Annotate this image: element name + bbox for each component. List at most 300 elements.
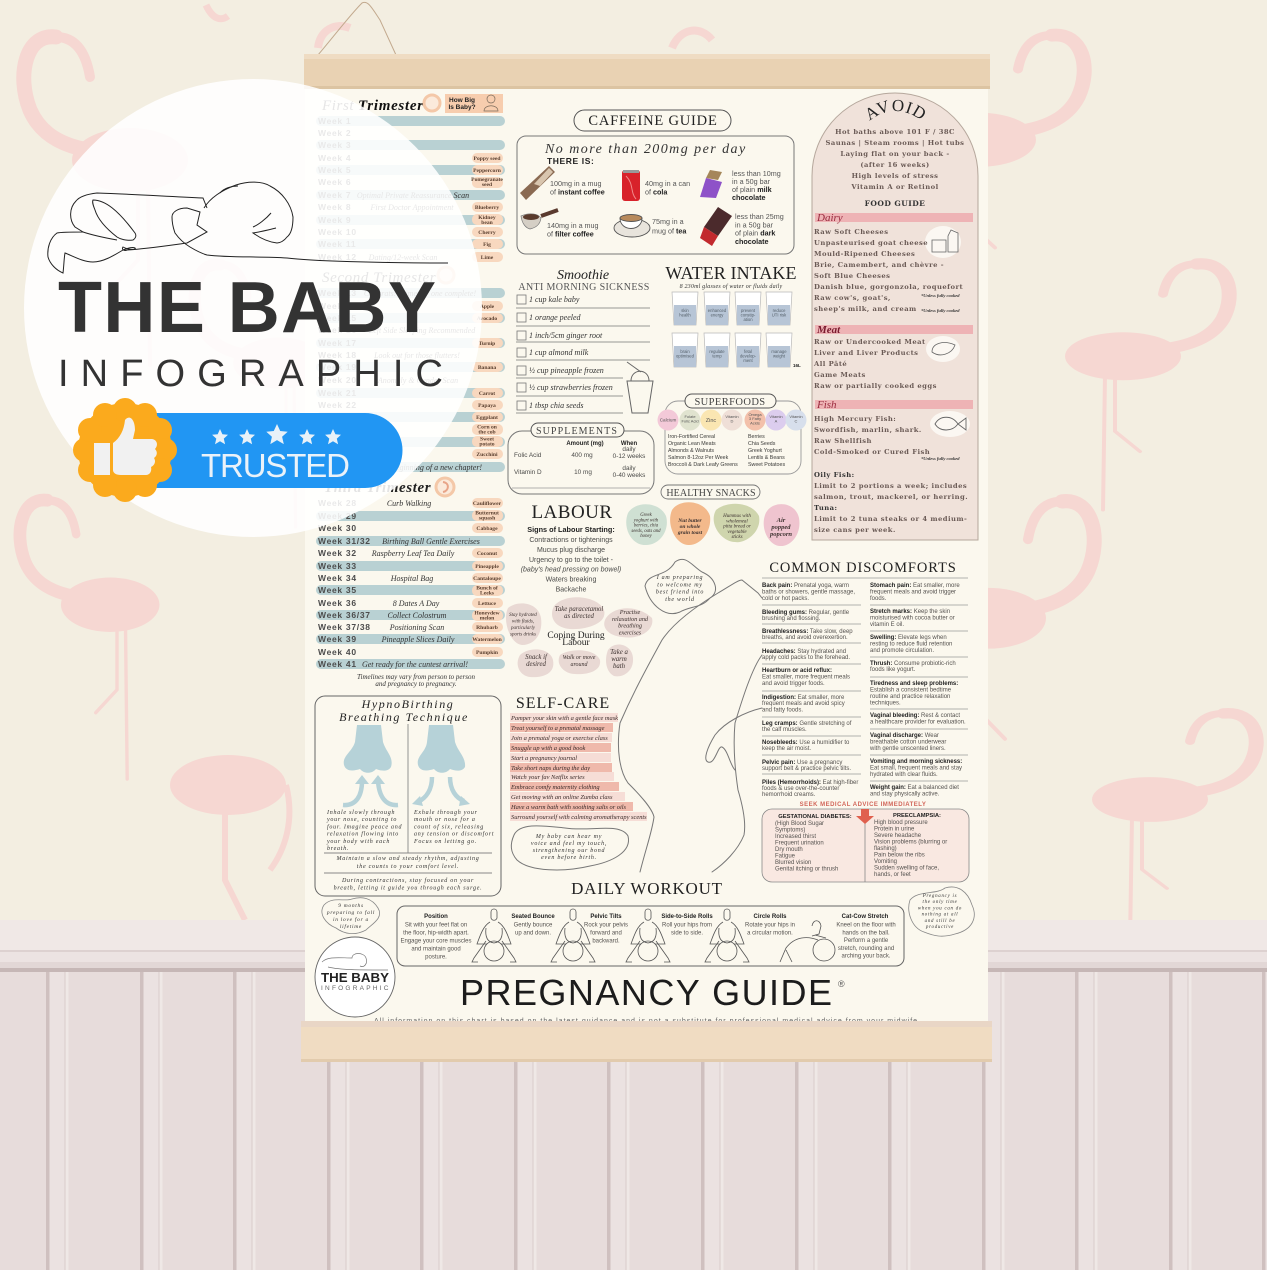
coping during labour blobs: exercises xyxy=(619,629,642,636)
bubble: 9 months: in love for a xyxy=(333,916,369,923)
supplements table xyxy=(514,441,645,479)
left column tips: brushing and flossing. xyxy=(762,616,821,622)
exercise: circle rolls xyxy=(745,914,835,962)
overlay: white logo circle xyxy=(24,79,482,537)
nutrient circles: Acids xyxy=(750,420,760,425)
coping during labour blobs: particularly xyxy=(510,626,536,631)
supplements table: 0-40 weeks xyxy=(613,472,645,479)
superfood lists: Broccoli & Dark Leafy Greens xyxy=(668,462,738,468)
week list: second trimester: Week 13 xyxy=(318,288,357,298)
ingredient list: 1 tbsp chia seeds xyxy=(529,401,583,410)
superfood lists xyxy=(668,434,785,468)
caffeine item: instant coffee: 100mg in a mug xyxy=(550,179,602,188)
superfood lists: Almonds & Walnuts xyxy=(668,448,714,454)
week list: second trimester: Avocado xyxy=(477,316,497,322)
caffeine item: tea: mug of xyxy=(652,226,676,236)
gestational diabetes list: Genital itching or thrush xyxy=(775,866,838,872)
week list: first trimester: Poppy seed xyxy=(474,156,501,162)
week list: first trimester: seed xyxy=(482,182,493,188)
nutrient circles: 3 Fatty xyxy=(749,416,761,421)
coping during labour blobs: bath xyxy=(613,663,626,670)
supplements table: daily xyxy=(622,465,636,472)
supplements table: Vitamin D xyxy=(514,469,542,476)
week list: third trimester: Week 29 xyxy=(318,511,357,521)
exercise: seated bounce: Gently bounce xyxy=(514,922,552,928)
supplements table: 10 mg xyxy=(574,469,592,476)
week list: first trimester: Week 2 xyxy=(318,128,351,138)
snack: yoghurt blob xyxy=(626,504,667,545)
timeline note xyxy=(357,673,475,688)
coping during labour blobs: Take a xyxy=(610,649,628,656)
left column tips xyxy=(762,583,858,798)
heading: self-care: SELF-CARE xyxy=(516,695,610,712)
trusted badge xyxy=(73,398,402,502)
self-care list: Have a warm bath with soothing salts or oils xyxy=(510,804,627,811)
week list: second trimester: Anomaly & Gender Scan xyxy=(377,376,458,385)
food guide: fish: Fish xyxy=(816,399,837,411)
timeline note: Timelines may vary from person to person xyxy=(357,673,475,681)
supplements table: When xyxy=(621,441,637,447)
how big is baby label: Is Baby? xyxy=(448,104,476,111)
left column tips: frequent meals and avoid spicy xyxy=(762,701,845,707)
superfood lists: Berries xyxy=(748,434,765,440)
week list: third trimester: 8 Dates A Day xyxy=(393,599,440,608)
week list: third trimester xyxy=(318,498,503,669)
week list: second trimester: the cob xyxy=(478,430,496,436)
right column tips: Tiredness and sleep problems: xyxy=(870,681,958,687)
glasses grid: develop- xyxy=(740,354,757,358)
week list: third trimester: Week 34 xyxy=(318,573,357,583)
exhale instructions: count of six, releasing xyxy=(414,823,484,830)
left column tips: Back pain: Prenatal yoga, warm xyxy=(762,583,849,589)
heading: avoid: AVOID xyxy=(868,100,925,121)
snack: hummus blob: Hummus with xyxy=(723,514,751,519)
overlay brand logo xyxy=(48,182,448,395)
glasses grid: fetal xyxy=(744,349,752,354)
exhale instructions: Exhale through your xyxy=(414,810,478,816)
caffeine item: dark chocolate: in a 50g bar xyxy=(735,220,774,229)
heading: superfoods: SUPERFOODS xyxy=(694,397,766,408)
week list: second trimester: Left Side Sleeping Recommended xyxy=(368,326,476,335)
heading: hypnobirthing: Breathing Technique xyxy=(339,710,469,724)
right column tips: resting to reduce fluid retention xyxy=(870,642,952,648)
bubble: 9 months xyxy=(322,898,380,934)
week list: second trimester: Week 24 xyxy=(318,425,357,435)
week list: second trimester: Sweet xyxy=(480,436,494,442)
food guide: fish xyxy=(814,399,973,534)
week list: third trimester: Week 40 xyxy=(318,647,357,657)
exercise: position: posture. xyxy=(425,954,447,960)
brand subtitle: INFOGRAPHIC xyxy=(58,353,443,395)
self-care list: Join a prenatal yoga or exercise class xyxy=(511,735,608,742)
icon: milk chocolate xyxy=(700,170,722,198)
signs of labour: Signs of Labour Starting: xyxy=(527,525,615,534)
exercise: position: the floor, hip-width apart. xyxy=(403,930,469,936)
gestational diabetes list xyxy=(775,814,852,872)
food guide: fish: Raw Shellfish xyxy=(814,437,872,445)
left column tips: and fatty foods. xyxy=(762,707,803,713)
affirmation bubble: best friend: best friend into xyxy=(656,589,704,596)
week list: second trimester: Week 16 xyxy=(318,325,357,335)
left column tips: keep the air moist. xyxy=(762,746,811,752)
coping during labour blobs: Walk or move xyxy=(563,655,595,661)
week list: third trimester: Get ready for the cuntest arrival! xyxy=(362,660,468,669)
exercise: pelvic tilts: Rock your pelvis xyxy=(584,922,628,928)
food guide: dairy: *Unless fully cooked xyxy=(921,293,960,298)
snack: nut butter blob: grain toast xyxy=(677,530,703,536)
right column tips: foods. xyxy=(870,596,887,602)
heading: seek medical advice: SEEK MEDICAL ADVICE IMMEDIATELY xyxy=(800,802,926,808)
snack: hummus blob xyxy=(714,504,759,542)
food guide: dairy: Unpasteurised goat cheese xyxy=(814,239,928,247)
glasses grid: energy xyxy=(711,312,724,318)
coping during labour blobs: Snack if xyxy=(525,654,547,661)
exhale instructions: mouth or nose for a xyxy=(414,816,476,823)
week list: third trimester: Week 37/38 xyxy=(318,622,371,632)
panel: water intake xyxy=(665,263,801,368)
heading: hypnobirthing xyxy=(339,697,469,724)
supplements table: Folic Acid xyxy=(514,452,542,459)
week list: first trimester: Week 7 xyxy=(318,190,351,200)
heading: third trimester: Third Trimester xyxy=(324,480,431,496)
food guide: dairy: Mould-Ripened Cheeses xyxy=(814,250,915,258)
heading: second trimester: Second Trimester xyxy=(322,270,436,286)
bubble: pregnancy productive: the only time xyxy=(922,900,958,905)
coping during labour blobs xyxy=(506,597,652,677)
week list: third trimester: Pineapple xyxy=(475,564,499,570)
week list: third trimester: Coconut xyxy=(477,551,497,557)
preeclampsia list: PREECLAMPSIA: xyxy=(893,813,941,819)
left column tips: cold or hot packs. xyxy=(762,596,809,602)
food guide: dairy: Raw cow's, goat's, xyxy=(814,294,891,302)
week list: second trimester: Week 20 xyxy=(318,375,357,385)
panel: daily workout xyxy=(397,879,904,966)
icon: instant coffee xyxy=(520,166,555,200)
bubble: pregnancy productive: productive xyxy=(925,925,954,930)
week list: second trimester: Week 27 xyxy=(318,462,357,472)
food guide: meat: Raw or partially cooked eggs xyxy=(814,382,937,390)
week list: first trimester: Cherry xyxy=(478,230,496,236)
week list: first trimester: Week 12 xyxy=(318,252,357,262)
nutrient circles: Vitamin xyxy=(725,414,739,419)
right column tips: vitamin E oil. xyxy=(870,622,904,628)
signs of labour: Contractions or tightenings xyxy=(529,537,613,544)
right column tips: Vaginal bleeding: Rest & contact xyxy=(870,713,960,719)
self-care list: Treat yourself to a prenatal massage xyxy=(511,725,605,732)
affirmation bubble: hear my voice: strengthening our bond xyxy=(533,848,606,854)
left column tips: Leg cramps: Gentle stretching of xyxy=(762,721,851,727)
coping during labour blobs: around xyxy=(570,662,589,668)
glasses grid: prevent xyxy=(741,308,755,313)
coping during labour blobs: warm xyxy=(611,656,627,663)
affirmation bubble: best friend: the world xyxy=(665,597,695,603)
week list: first trimester: Week 8 xyxy=(318,202,351,212)
things to avoid: Hot baths above 101 F / 38C xyxy=(835,128,955,136)
supplements table: 0-12 weeks xyxy=(613,453,645,460)
week list: second trimester: Week 19 xyxy=(318,362,357,372)
week list: third trimester: Watermelon xyxy=(472,637,503,643)
superfood lists: Lentils & Beans xyxy=(748,455,785,461)
heading: daily workout: DAILY WORKOUT xyxy=(571,879,723,898)
food guide: meat: Game Meats xyxy=(814,371,866,379)
right column tips: breathable cotton underwear xyxy=(870,740,946,746)
contractions note: breath, letting it guide you through each surge. xyxy=(334,886,482,892)
caffeine item: milk chocolate: of plain xyxy=(732,185,757,194)
glasses grid: UTI risk xyxy=(772,312,787,318)
coping during labour blobs: desired xyxy=(526,661,546,668)
week list: third trimester: Week 31/32 xyxy=(318,536,371,546)
left column tips: support belt & practice pelvic tilts. xyxy=(762,766,851,772)
food guide: fish: salmon, trout, mackerel, or herring. xyxy=(814,493,968,501)
signs of labour: Waters breaking xyxy=(546,576,596,584)
week list: third trimester: Cauliflower xyxy=(473,501,502,507)
caffeine item: tea: tea xyxy=(676,226,687,236)
right column tips xyxy=(869,583,966,798)
exercise: pelvic tilts xyxy=(584,909,670,962)
blue pill xyxy=(150,413,402,488)
inhale instructions: Inhale slowly through xyxy=(327,810,395,816)
week list: second trimester: Eggplant xyxy=(476,415,498,421)
exercise: circle rolls: Rotate your hips in xyxy=(745,922,795,928)
exercise: seated bounce: up and down. xyxy=(515,930,551,936)
nutrient circles: Folate xyxy=(684,414,696,419)
week list: second trimester: Week 23 xyxy=(318,412,357,422)
exercise: position: Sit with your feet flat on xyxy=(405,922,467,928)
week list: third trimester: Week 41 xyxy=(318,659,357,669)
glasses grid: ation xyxy=(743,317,753,322)
exercise: seated bounce xyxy=(511,909,595,962)
week list: first trimester: Peppercorn xyxy=(473,168,502,174)
right column tips: and stay physically active. xyxy=(870,792,940,798)
right column tips: and promote circulation. xyxy=(870,648,934,654)
week list: third trimester: melon xyxy=(480,616,495,622)
gestational diabetes list: GESTATIONAL DIABETES: xyxy=(778,814,852,820)
panel: supplements xyxy=(508,423,654,494)
exercise: cat-cow stretch: arching your back. xyxy=(841,954,891,960)
heading: caffeine guide xyxy=(574,110,731,131)
superfood lists: Greek Yoghurt xyxy=(748,448,782,454)
flamingo wallpaper xyxy=(20,5,1256,943)
ingredient list: ½ cup pineapple frozen xyxy=(529,366,604,375)
icon: nose inhale xyxy=(343,725,398,805)
gestational diabetes list: Dry mouth xyxy=(775,847,803,853)
supplements table: 400 mg xyxy=(571,452,593,459)
bubble: 9 months: 9 months xyxy=(338,903,364,909)
self-care list: Watch your fav Netflix series xyxy=(511,774,585,781)
exhale instructions: Focus on letting go. xyxy=(413,839,477,845)
right column tips: frequent meals and avoid trigger xyxy=(870,590,956,596)
week list: second trimester: Week 25 xyxy=(318,437,357,447)
food guide: dairy: *Unless fully cooked xyxy=(921,308,960,313)
inhale instructions: relaxation flowing into xyxy=(327,831,399,838)
wooden rod: bottom xyxy=(301,1021,992,1062)
food guide: meat xyxy=(813,324,973,390)
supplements table: Amount (mg) xyxy=(566,441,604,447)
affirmation bubble: hear my voice: My baby can hear my xyxy=(536,834,602,840)
right column tips: a healthcare provider for evaluation. xyxy=(870,720,966,726)
week list: third trimester: Positioning Scan xyxy=(389,623,444,632)
icon: nose exhale xyxy=(412,725,470,806)
week list: first trimester: Optimal Private Reassurance Scan xyxy=(357,191,469,200)
stars xyxy=(212,424,341,444)
left column tips: hemorrhoid creams. xyxy=(762,792,816,798)
exercise: seated bounce: Seated Bounce xyxy=(511,914,555,920)
food guide: fish: Oily Fish: xyxy=(814,471,855,479)
week list: first trimester: Week 10 xyxy=(318,227,357,237)
week list: second trimester: Turnip xyxy=(479,341,495,347)
heading: food guide: FOOD GUIDE xyxy=(865,199,925,208)
exercise: circle rolls: Circle Rolls xyxy=(753,914,787,920)
left column tips: Piles (Hemorrhoids): Eat high-fiber xyxy=(762,780,858,786)
trusted word: TRUSTED xyxy=(201,447,350,484)
week list: second trimester: Zucchini xyxy=(476,452,498,458)
heading: superfoods xyxy=(685,394,776,408)
contractions note: During contractions, stay focused on your xyxy=(342,878,474,884)
things to avoid: Saunas | Steam rooms | Hot tubs xyxy=(826,139,964,147)
self-care list: Pamper your skin with a gentle face mask xyxy=(510,715,618,722)
caffeine item: filter coffee: filter coffee xyxy=(555,230,594,238)
affirmation bubble: best friend xyxy=(645,559,716,614)
week list: first trimester: Blueberry xyxy=(475,205,499,211)
hanging string xyxy=(318,2,396,55)
panel: self-care xyxy=(510,695,647,821)
week list: third trimester: Week 33 xyxy=(318,561,357,571)
week list: second trimester: Banana xyxy=(478,365,496,371)
signs of labour: Urgency to go to the toilet - xyxy=(529,557,614,564)
week list: second trimester: Week 15 xyxy=(318,313,357,323)
left column tips: Nosebleeds: Use a humidifier to xyxy=(762,740,849,746)
bubble: pregnancy productive xyxy=(909,887,974,936)
things to avoid: High levels of stress xyxy=(852,172,938,180)
icon: tea cup xyxy=(614,214,650,237)
heading: first trimester xyxy=(321,95,440,114)
superfood lists: Sweet Potatoes xyxy=(748,462,785,468)
coping during labour blobs: breathing xyxy=(618,623,642,630)
disclaimer: All information on this chart is based on the latest guidance and is not a substitute for professional medical advice from your midwife. xyxy=(374,1018,920,1025)
exercise: position xyxy=(400,909,516,962)
glasses grid: weight xyxy=(773,354,786,358)
things to avoid xyxy=(826,128,964,191)
week list: third trimester: Week 39 xyxy=(318,634,357,644)
self-care list: Get moving with an online Zumba class xyxy=(511,794,613,801)
self-care list: Surround yourself with calming aromatherapy scents xyxy=(511,814,647,821)
ingredient list: ½ cup strawberries frozen xyxy=(529,383,613,392)
snack: popcorn blob: Air xyxy=(777,517,785,524)
food guide: meat: Meat xyxy=(816,324,841,336)
glasses grid: regulate xyxy=(709,349,725,354)
week list: first trimester: Week 3 xyxy=(318,140,351,150)
wall background xyxy=(0,0,1267,922)
exercise: pelvic tilts: forward and xyxy=(590,930,622,936)
preeclampsia list: Severe headache xyxy=(874,833,922,839)
week list: third trimester: Birthing Ball Gentle Exercises xyxy=(382,537,480,546)
caffeine item: milk chocolate: in a 50g bar xyxy=(732,177,771,186)
snack: hummus blob: sticks xyxy=(731,535,743,540)
week list: third trimester: Rhubarb xyxy=(476,625,498,631)
right column tips: Establish a consistent bedtime xyxy=(870,688,952,694)
glasses grid: brain xyxy=(680,349,690,354)
caffeine item: instant coffee: of xyxy=(550,188,558,196)
nutrient circles: Folic Acid xyxy=(681,418,699,424)
exercise: position: Engage your core muscles xyxy=(400,938,472,944)
week list: third trimester: Honeydew xyxy=(474,610,501,616)
exercise: position: Position xyxy=(424,914,448,920)
preeclampsia list xyxy=(874,813,947,878)
baby line drawing xyxy=(48,182,448,273)
things to avoid: (after 16 weeks) xyxy=(860,161,930,169)
superfood lists: Salmon 8-12oz Per Week xyxy=(668,455,729,461)
glasses grid: 16L xyxy=(793,363,801,368)
week list: third trimester: Week 36 xyxy=(318,598,357,608)
self-care list: Snuggle up with a good book xyxy=(511,745,586,752)
food guide: fish: Limit to 2 tuna steaks or 4 medium- xyxy=(814,515,967,523)
caffeine item: dark chocolate: of plain xyxy=(735,229,760,238)
panel: trimester timeline xyxy=(316,94,505,688)
snack: yoghurt blob: berries, chia xyxy=(634,524,659,529)
left column tips: baths or showers, gentle massage, xyxy=(762,590,855,596)
icon: cola can xyxy=(622,170,640,201)
left column tips: Eat smaller, more frequent meals xyxy=(762,674,850,680)
main title: PREGNANCY GUIDE xyxy=(460,972,832,1013)
bubble: pregnancy productive: and still be xyxy=(925,919,955,924)
nutrient circles: D xyxy=(731,418,734,424)
heading: labour: LABOUR xyxy=(531,502,613,523)
week list: first trimester: Week 9 xyxy=(318,215,351,225)
panel: avoid arch xyxy=(812,92,978,540)
glasses grid: manage xyxy=(771,349,787,354)
things to avoid: Vitamin A or Retinol xyxy=(850,183,939,191)
caffeine item: cola: of xyxy=(645,188,653,196)
ingredient list: 1 orange peeled xyxy=(529,313,582,322)
heading: water intake: WATER INTAKE xyxy=(665,263,797,283)
affirmation bubble: hear my voice: voice and feel my touch, xyxy=(531,840,607,847)
glasses grid: constip- xyxy=(741,312,756,318)
food guide: dairy xyxy=(814,212,973,313)
affirmation bubble: best friend: to welcome my xyxy=(657,582,703,588)
glasses grid: temp xyxy=(712,354,722,358)
week list: third trimester: Leeks xyxy=(480,590,495,596)
panel: hypnobirthing breathing technique xyxy=(315,696,501,896)
left column tips: apply cold packs to the forehead. xyxy=(762,655,850,661)
week list: second trimester xyxy=(318,288,498,472)
panel: healthy snacks xyxy=(626,485,799,546)
food guide: dairy: Dairy xyxy=(816,212,843,224)
inhale instructions: your nose, counting to xyxy=(326,817,397,823)
food guide: fish: Swordfish, marlin, shark. xyxy=(814,426,922,434)
ingredient list: 1 cup almond milk xyxy=(529,348,589,357)
snack: nut butter blob: Nut butter xyxy=(678,518,702,524)
exercise: side-to-side rolls xyxy=(661,909,749,962)
food guide: meat: All Pâté xyxy=(813,360,847,368)
ingredient list: 1 cup kale baby xyxy=(529,295,580,304)
preeclampsia list: Protein in urine xyxy=(874,826,915,832)
self-care list xyxy=(510,715,647,821)
poster logo: INFOGRAPHIC xyxy=(321,985,389,992)
caffeine limit: No more than 200mg per day xyxy=(544,142,747,157)
superfood lists: Organic Lean Meats xyxy=(668,441,716,447)
icon: smoothie cup xyxy=(627,362,653,413)
exercise: side-to-side rolls: Roll your hips from xyxy=(662,922,712,928)
week list: first trimester: Fig xyxy=(483,242,491,248)
things to avoid: Laying flat on your back - xyxy=(840,150,950,158)
bubble: 9 months: preparing to fall xyxy=(326,909,375,916)
nutrient circles: Calcium xyxy=(660,418,676,422)
food guide: fish: size cans per week. xyxy=(814,526,896,534)
exercise: cat-cow stretch: stretch, rounding and xyxy=(838,946,894,952)
self-care list: Take short naps during the day xyxy=(511,765,590,772)
right column tips: Eat small, frequent meals and stay xyxy=(870,766,962,772)
signs of labour: Backache xyxy=(556,586,586,594)
